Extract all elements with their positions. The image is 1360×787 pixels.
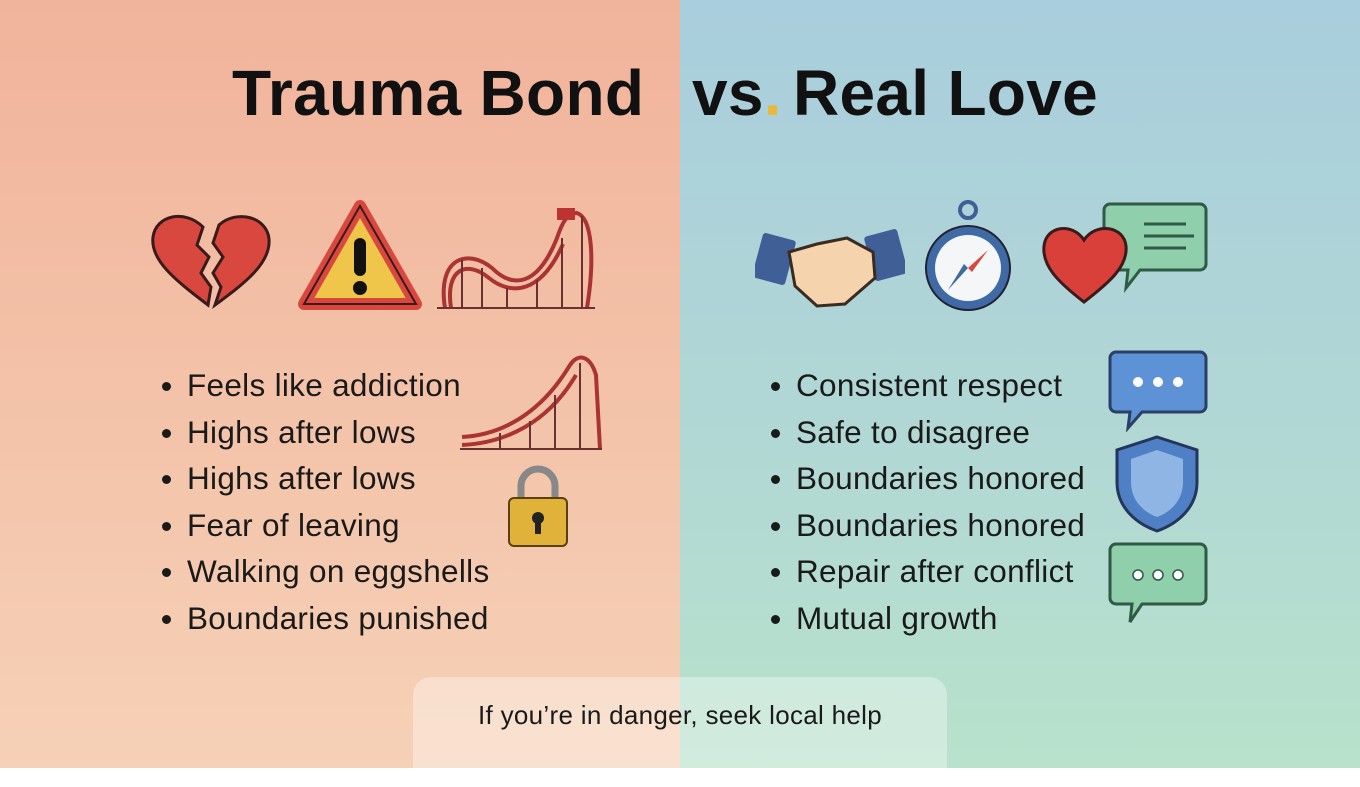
icon: heart and speech bubble bbox=[1042, 202, 1208, 304]
list: trauma bond: Highs after lows bbox=[187, 460, 416, 496]
list: real love: Repair after conflict bbox=[796, 553, 1074, 589]
footer callout: If you’re in danger, seek local help bbox=[478, 700, 882, 730]
list: real love bbox=[771, 367, 1085, 636]
list: trauma bond: Walking on eggshells bbox=[187, 553, 490, 589]
list: real love: Mutual growth bbox=[796, 600, 998, 636]
list: trauma bond: Highs after lows bbox=[187, 414, 416, 450]
icon: shield bbox=[1116, 435, 1198, 533]
icon: compass bbox=[925, 200, 1011, 311]
list: trauma bond bbox=[162, 367, 490, 636]
icon: roller coaster bbox=[437, 208, 595, 309]
icon: warning bbox=[298, 200, 422, 310]
icon: handshake bbox=[755, 229, 905, 308]
list: trauma bond: Fear of leaving bbox=[187, 506, 400, 542]
icon: green chat bubble bbox=[1108, 542, 1208, 623]
list: real love: Safe to disagree bbox=[796, 414, 1030, 450]
title bbox=[232, 57, 1098, 129]
list: trauma bond: Feels like addiction bbox=[187, 367, 461, 403]
list: real love: Consistent respect bbox=[796, 367, 1062, 403]
list: real love: Boundaries honored bbox=[796, 506, 1085, 542]
title: Trauma Bond bbox=[232, 57, 644, 129]
footer callout bbox=[413, 677, 947, 787]
icon: blue chat bubble bbox=[1108, 350, 1208, 432]
list: trauma bond: Boundaries punished bbox=[187, 600, 489, 636]
title: vs. bbox=[692, 57, 782, 129]
list: real love: Boundaries honored bbox=[796, 460, 1085, 496]
icon: padlock bbox=[508, 466, 568, 547]
title: Real Love bbox=[793, 57, 1098, 129]
icon: broken heart bbox=[151, 214, 271, 309]
icon: small coaster bbox=[460, 356, 602, 450]
